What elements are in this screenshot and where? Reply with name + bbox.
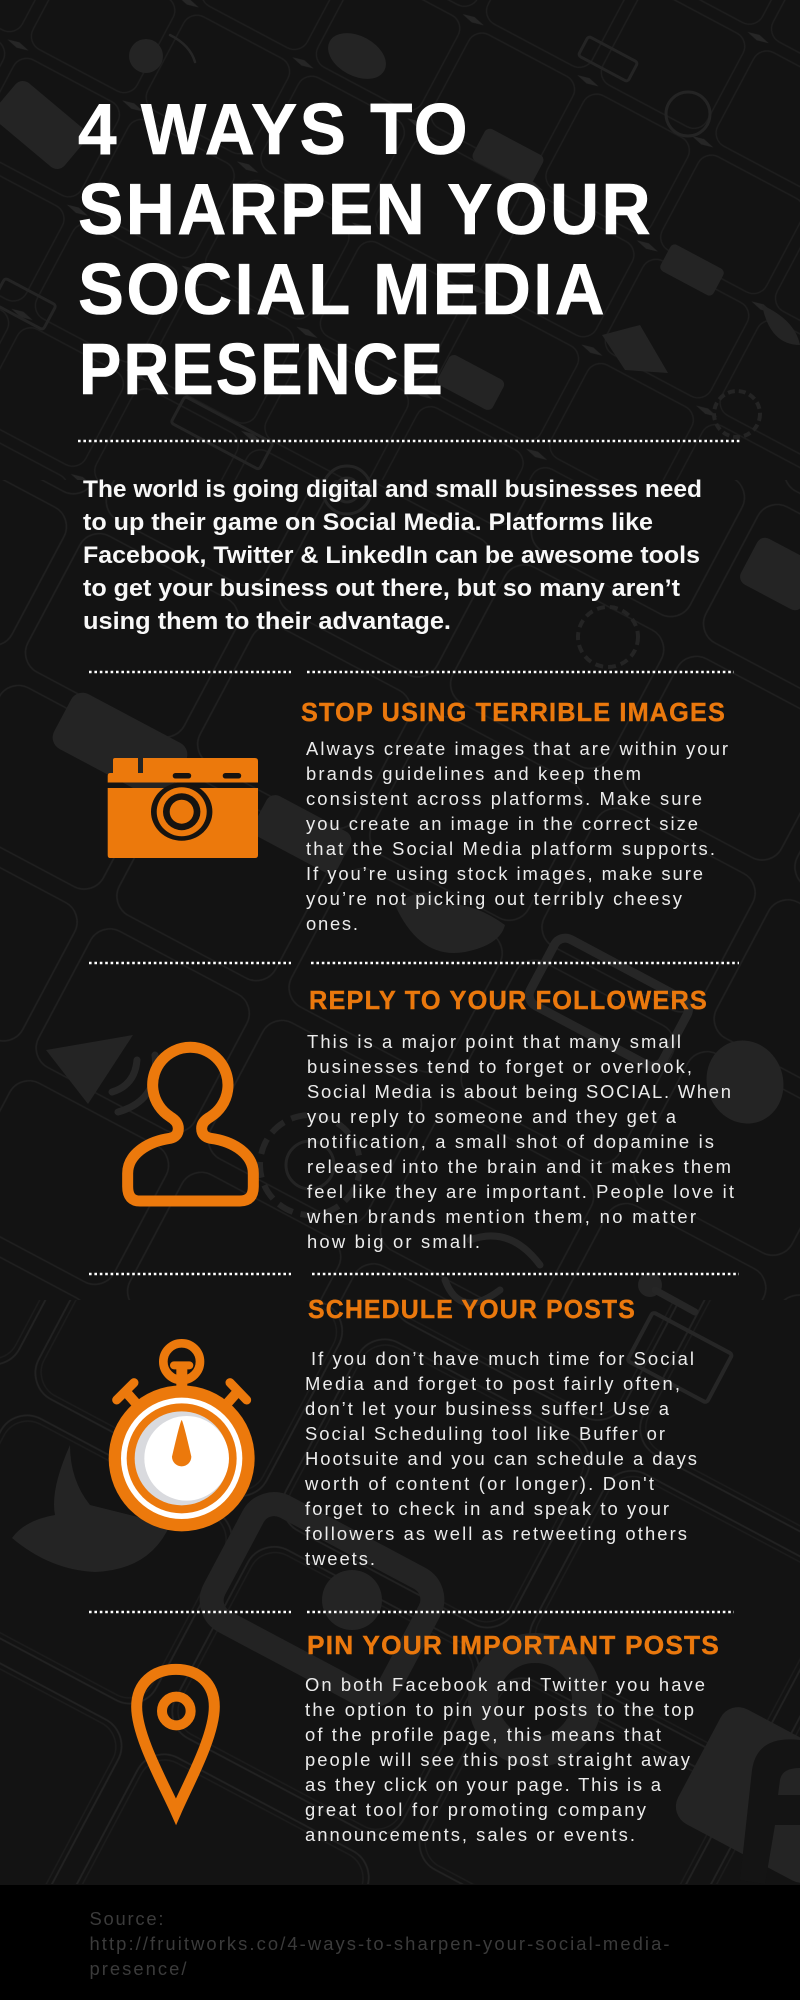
icon: camera [108,758,258,858]
body text [305,1674,705,1845]
body text [306,738,728,934]
panel: pin your important posts [137,1630,720,1845]
heading: STOP USING TERRIBLE IMAGES [301,697,726,727]
body text: how big or small. [307,1231,480,1252]
body text: Social Scheduling tool like Buffer or [305,1423,665,1444]
body text: Social Media is about being SOCIAL. When [307,1081,731,1102]
body text: you reply to someone and they get a [307,1106,677,1127]
body text: Media and forget to post fairly often, [305,1373,680,1394]
heading: PIN YOUR IMPORTANT POSTS [307,1630,720,1660]
body text: Hootsuite and you can schedule a days [305,1448,697,1469]
panel: reply to your followers [128,985,734,1252]
title [78,90,653,410]
icon: person [128,1047,253,1201]
intro text: to up their game on Social Media. Platforms like [83,509,653,536]
body text: of the profile page, this means that [305,1724,661,1745]
intro text [83,476,702,635]
body text: you’re not picking out terribly cheesy [306,888,683,909]
body text: brands guidelines and keep them [306,763,641,784]
footer: source: presence/ [90,1958,187,1979]
title: 4 WAYS TO [78,90,470,170]
panel: schedule your posts [109,1294,697,1569]
body text: people will see this post straight away [305,1749,691,1770]
body text: consistent across platforms. Make sure [306,788,702,809]
body text [306,1031,734,1252]
body text: released into the brain and it makes them [307,1156,731,1177]
body text: If you don’t have much time for Social [311,1348,694,1369]
body text: businesses tend to forget or overlook, [307,1056,692,1077]
title: SOCIAL MEDIA [78,250,607,330]
body text: you create an image in the correct size [306,813,698,834]
body text: tweets. [305,1548,375,1569]
heading: SCHEDULE YOUR POSTS [308,1294,636,1324]
intro text: to get your business out there, but so many aren’t [83,575,680,602]
body text: that the Social Media platform supports. [306,838,715,859]
title: PRESENCE [79,330,445,410]
panel: stop using terrible images [108,697,728,934]
body text: feel like they are important. People love it [307,1181,734,1202]
footer: source [0,1885,800,2000]
body text: worth of content (or longer). Don't [304,1473,654,1494]
body text: followers as well as retweeting others [305,1523,687,1544]
icon: stopwatch [109,1343,255,1531]
intro text: The world is going digital and small businesses need [83,476,702,503]
body text: as they click on your page. This is a [305,1774,662,1795]
body text: Always create images that are within your [306,738,728,759]
body text: This is a major point that many small [307,1031,681,1052]
body text: notification, a small shot of dopamine is [307,1131,714,1152]
background icons: faint social shapes, bottom [12,1445,800,1890]
heading: REPLY TO YOUR FOLLOWERS [309,985,708,1015]
footer: source: Source: [90,1908,164,1929]
body text: forget to check in and speak to your [305,1498,669,1519]
icon: map pin [137,1669,214,1812]
body text: announcements, sales or events. [305,1824,635,1845]
body text: the option to pin your posts to the top [305,1699,694,1720]
body text [304,1348,697,1569]
body text: ones. [306,913,358,934]
title: SHARPEN YOUR [78,170,653,250]
background icons: faint social shapes, top [0,24,800,667]
body text: great tool for promoting company [305,1799,647,1820]
intro text: Facebook, Twitter & LinkedIn can be awesome tools [83,542,700,569]
body text: don’t let your business suffer! Use a [305,1398,670,1419]
body text: If you’re using stock images, make sure [306,863,703,884]
footer: source: http://fruitworks.co/4-ways-to-sharpen-your-social-media- [90,1933,669,1954]
intro text: using them to their advantage. [83,608,451,635]
background icons: faint social shapes, middle [46,688,795,1403]
body text: On both Facebook and Twitter you have [305,1674,705,1695]
body text: when brands mention them, no matter [306,1206,696,1227]
